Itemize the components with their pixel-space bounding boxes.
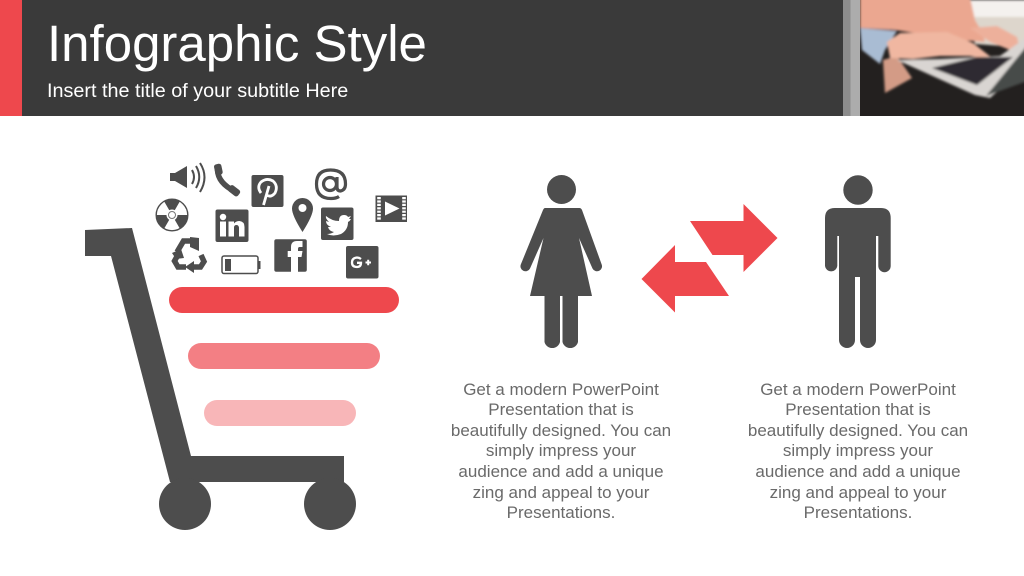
icon: speaker (170, 163, 204, 192)
icon: pinterest (252, 175, 284, 207)
text block: right: audience and add a unique (755, 462, 961, 481)
text block: right: zing and appeal to your (770, 483, 946, 502)
text block: left: simply impress your (486, 441, 636, 460)
icon: linkedin (216, 210, 248, 242)
text block: left: Presentations. (507, 503, 615, 522)
icon: battery (222, 256, 260, 274)
icon: facebook (274, 239, 307, 272)
text block: left: Get a modern PowerPoint (463, 380, 659, 398)
text block: left: beautifully designed. You can (451, 421, 671, 440)
cart bar: bottom (204, 400, 356, 426)
shopping cart with icons (85, 228, 399, 530)
icon cloud (156, 162, 407, 278)
icon: google plus (346, 246, 378, 278)
text block: right: beautifully designed. You can (748, 421, 968, 440)
text block: right: Presentations. (804, 503, 912, 522)
text block: right: simply impress your (783, 441, 933, 460)
icon: phone (214, 163, 241, 197)
subtitle: Insert the title of your subtitle Here (47, 80, 348, 102)
icon: recycle (172, 237, 204, 273)
arrow: right (690, 204, 778, 272)
cart frame and wheels (85, 228, 356, 530)
text block: left: audience and add a unique (458, 462, 664, 481)
cart bar: middle (188, 343, 380, 369)
text block: right (748, 380, 968, 522)
header band (0, 0, 1024, 116)
icon: man (825, 175, 891, 348)
title: Infographic Style (47, 15, 427, 72)
arrows: exchange between woman and man (642, 204, 778, 312)
icon: radiation (156, 199, 188, 231)
text block: left (451, 380, 671, 522)
text block: right: Presentation that is (785, 400, 931, 419)
icon: map pin (292, 198, 313, 232)
header photo: hands typing on a laptop (843, 0, 1024, 116)
icon: twitter (321, 208, 354, 240)
arrow: left (642, 245, 729, 312)
cart bar: top (169, 287, 399, 313)
icon: film strip (376, 196, 407, 222)
text block: right: Get a modern PowerPoint (760, 380, 956, 398)
text block: left: zing and appeal to your (473, 483, 649, 502)
icon: at sign (316, 170, 346, 198)
icon: woman (520, 175, 602, 348)
text block: left: Presentation that is (488, 400, 634, 419)
red accent bar (0, 0, 22, 116)
